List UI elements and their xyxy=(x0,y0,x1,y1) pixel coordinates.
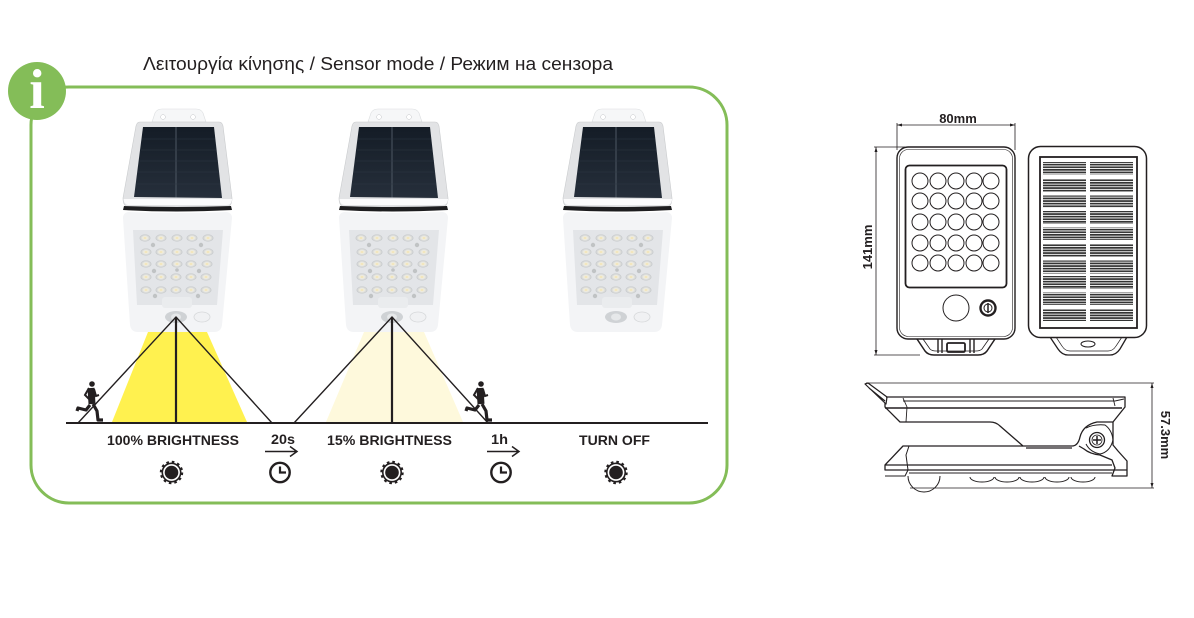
icon: info badge: i xyxy=(29,59,45,121)
arrow: 20s xyxy=(265,446,297,456)
panel: sensor mode frame xyxy=(31,87,727,503)
label: turn off: TURN OFF xyxy=(579,433,650,448)
label: 15% brightness: 15% BRIGHTNESS xyxy=(327,433,452,448)
technical drawing: side view xyxy=(865,383,1127,492)
technical drawing: back view with solar cells xyxy=(1028,146,1146,355)
heading: Λειτουργία κίνησης / Sensor mode / Режим на сензора xyxy=(143,54,614,74)
icon: sun off xyxy=(605,462,627,483)
dimension: height 141mm: 141mm xyxy=(860,225,875,269)
technical drawing: front view xyxy=(897,147,1015,355)
icon: info badge xyxy=(8,59,66,121)
sensor cone: first lamp xyxy=(78,317,272,423)
arrow: 1h xyxy=(487,446,519,456)
sensor cone: second lamp xyxy=(294,317,488,423)
icon: clock 1h xyxy=(491,463,511,482)
label: 20s: 20s xyxy=(271,432,295,447)
dimension: depth 57.3mm xyxy=(866,383,1173,488)
dimension: width 80mm xyxy=(897,111,1015,150)
light beam: 100% brightness xyxy=(112,332,247,422)
icon: runner right xyxy=(466,381,492,420)
icon: clock 20s xyxy=(270,463,290,482)
light beam: 15% brightness xyxy=(326,332,463,422)
ground line xyxy=(66,422,708,424)
icon: runner left xyxy=(77,381,103,420)
lamp: off xyxy=(563,109,672,332)
dimension: width 80mm: 80mm xyxy=(939,111,977,126)
icon: sun 100% xyxy=(161,462,182,483)
label: 1h: 1h xyxy=(491,432,508,447)
label: 100% brightness: 100% BRIGHTNESS xyxy=(107,433,239,448)
lamp: 15% brightness xyxy=(339,109,448,332)
icon: sun 15% xyxy=(381,462,403,483)
dimension: height 141mm xyxy=(860,147,920,355)
dimension: depth 57.3mm: 57.3mm xyxy=(1158,411,1173,459)
lamp: 100% brightness xyxy=(123,109,232,332)
